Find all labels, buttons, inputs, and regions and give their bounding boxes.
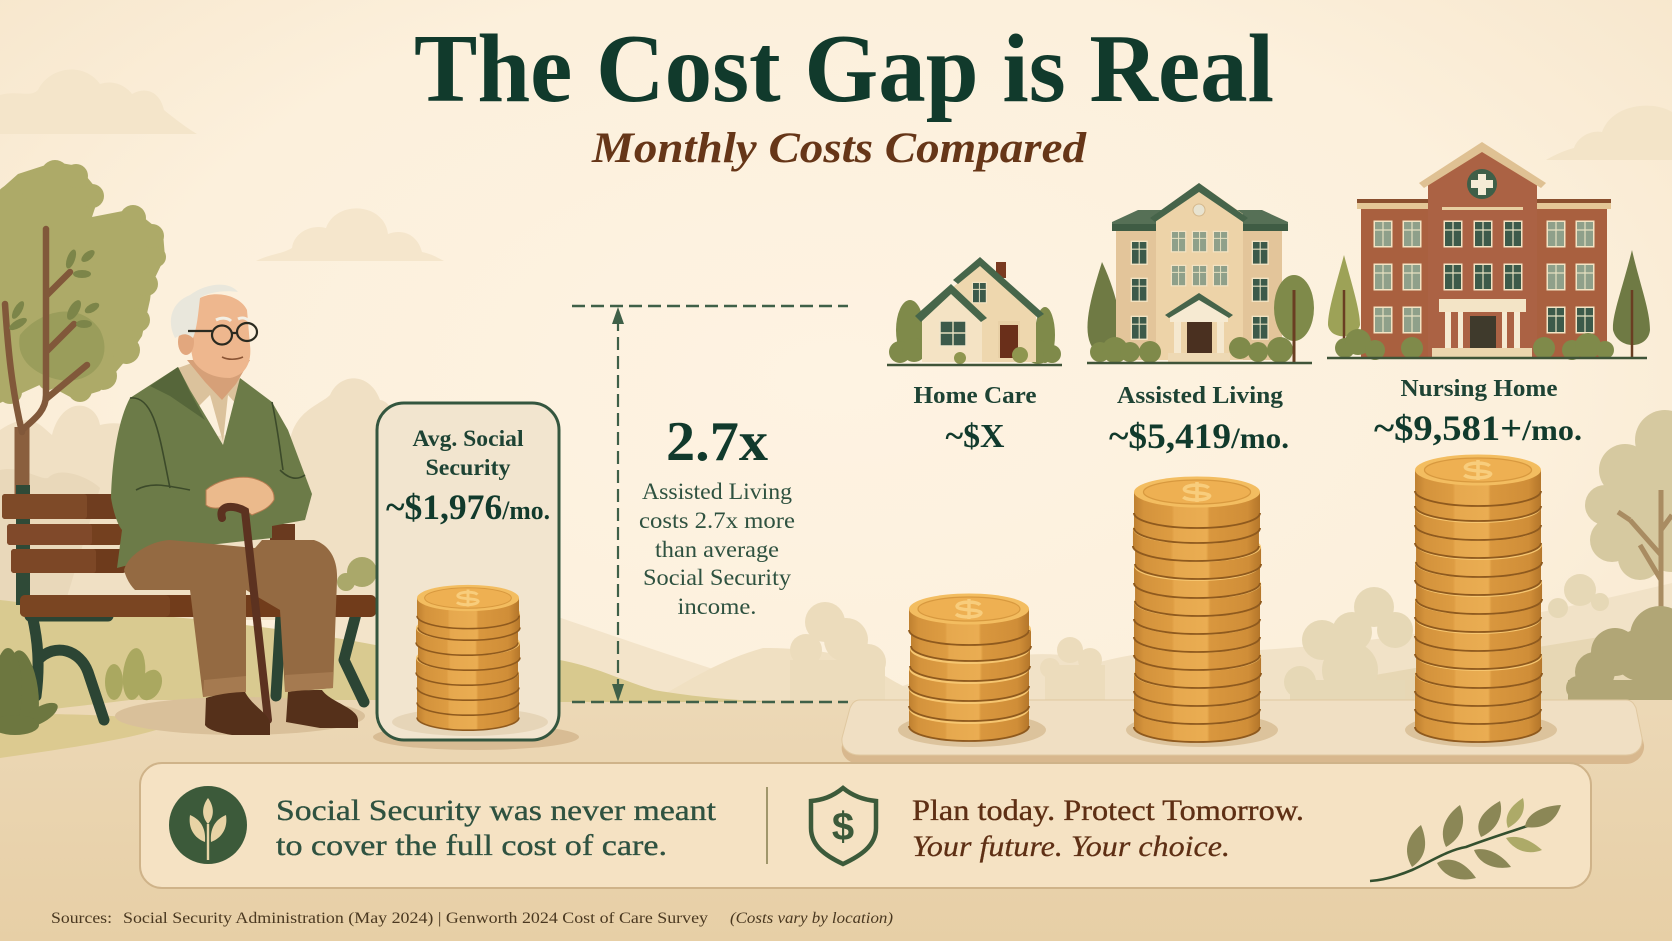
bench back slats [2, 485, 295, 605]
portico [1187, 321, 1212, 353]
lawn middle [560, 660, 770, 702]
windows [1374, 220, 1594, 334]
label: nursing home: Nursing Home [1400, 376, 1558, 402]
background hill: beige [300, 597, 820, 700]
bench shadow [115, 697, 365, 735]
label: assisted living [1109, 383, 1289, 456]
portico [1470, 316, 1496, 348]
icon: home care house [887, 257, 1062, 365]
background bush group [790, 602, 1105, 702]
label: nursing home [1374, 376, 1582, 448]
bush: beside card [337, 557, 377, 591]
card amount: ~$1,976/mo. [386, 487, 550, 527]
takeaway text: to cover the full cost of care. [276, 829, 667, 862]
coin stack: home care [898, 594, 1046, 747]
title: The Cost Gap is Real [414, 15, 1274, 123]
pants [124, 540, 337, 697]
label: assisted living: Assisted Living [1117, 383, 1283, 409]
shoes [205, 692, 270, 735]
trees and bushes [1090, 275, 1314, 363]
tree: right background [1585, 410, 1672, 612]
gap explanation [639, 479, 795, 619]
smile [222, 357, 243, 359]
icon: branch [1370, 798, 1561, 881]
bench legs [30, 614, 364, 720]
icon: sprout [169, 786, 247, 864]
side wings [1116, 230, 1282, 360]
hair [171, 285, 238, 338]
trees [1328, 255, 1360, 336]
gap explanation: than average [655, 537, 779, 562]
coin stack: assisted living [1126, 476, 1278, 747]
label: home care: ~$X [946, 418, 1005, 455]
takeaway text [276, 794, 717, 862]
cloud: top right [1546, 106, 1672, 160]
bush: behind bench [105, 647, 167, 704]
label: nursing home: ~$9,581+ /mo. [1374, 408, 1582, 448]
sources footnote: Sources: [51, 910, 112, 927]
background hill: right [860, 583, 1672, 700]
tree: left [0, 160, 166, 500]
gap explanation: costs 2.7x more [639, 508, 795, 533]
gap value: 2.7x [666, 411, 768, 473]
gap explanation: Assisted Living [642, 479, 793, 504]
label: assisted living: ~$5,419/mo. [1109, 416, 1289, 456]
bench seat [20, 595, 376, 617]
plan text: Plan today. Protect Tomorrow. [912, 794, 1304, 827]
glasses [188, 323, 257, 344]
bush: right foreground [1566, 606, 1672, 702]
cloud: top left [0, 70, 197, 134]
platform [842, 700, 1644, 764]
bench [2, 485, 376, 720]
centre block [1156, 183, 1243, 360]
ear [178, 329, 194, 355]
coin stack: social security [392, 585, 548, 736]
wings [1361, 205, 1607, 357]
sources footnote [51, 910, 893, 927]
hands [206, 477, 274, 515]
icon: nursing home building [1327, 142, 1650, 360]
plan text [912, 794, 1304, 863]
bush: left foreground [0, 648, 61, 735]
bushes [1335, 329, 1614, 360]
gap bracket [572, 306, 848, 702]
centre tower [1428, 150, 1537, 357]
sweater [111, 367, 312, 568]
icon: shield [811, 788, 876, 864]
cane [221, 507, 268, 720]
cloud: centre [256, 208, 444, 261]
elderly man [111, 285, 358, 735]
takeaway text: Social Security was never meant [276, 794, 717, 827]
card label: Avg. Social [412, 426, 524, 451]
background bushes behind bench [0, 378, 403, 620]
label: home care [914, 383, 1037, 455]
subtitle: Monthly Costs Compared [591, 125, 1088, 172]
sources footnote: (Costs vary by location) [730, 910, 893, 927]
panel: takeaway banner [140, 763, 1591, 888]
head [188, 294, 250, 378]
label: home care: Home Care [914, 383, 1037, 409]
neck and shirt [178, 360, 240, 442]
icon: assisted living building [1087, 183, 1314, 363]
sources footnote: Social Security Administration (May 2024) | Genworth 2024 Cost of Care Survey [123, 910, 708, 927]
icon: shield: $ [832, 805, 854, 849]
coin stack: nursing home [1405, 454, 1557, 747]
gap explanation: Social Security [643, 565, 792, 590]
gap explanation: income. [678, 594, 756, 619]
card: avg social security [373, 403, 579, 750]
card: avg social security: Security [426, 455, 511, 480]
plan text: Your future. Your choice. [912, 830, 1230, 863]
lawn left [0, 600, 400, 716]
ground path [0, 700, 1672, 941]
